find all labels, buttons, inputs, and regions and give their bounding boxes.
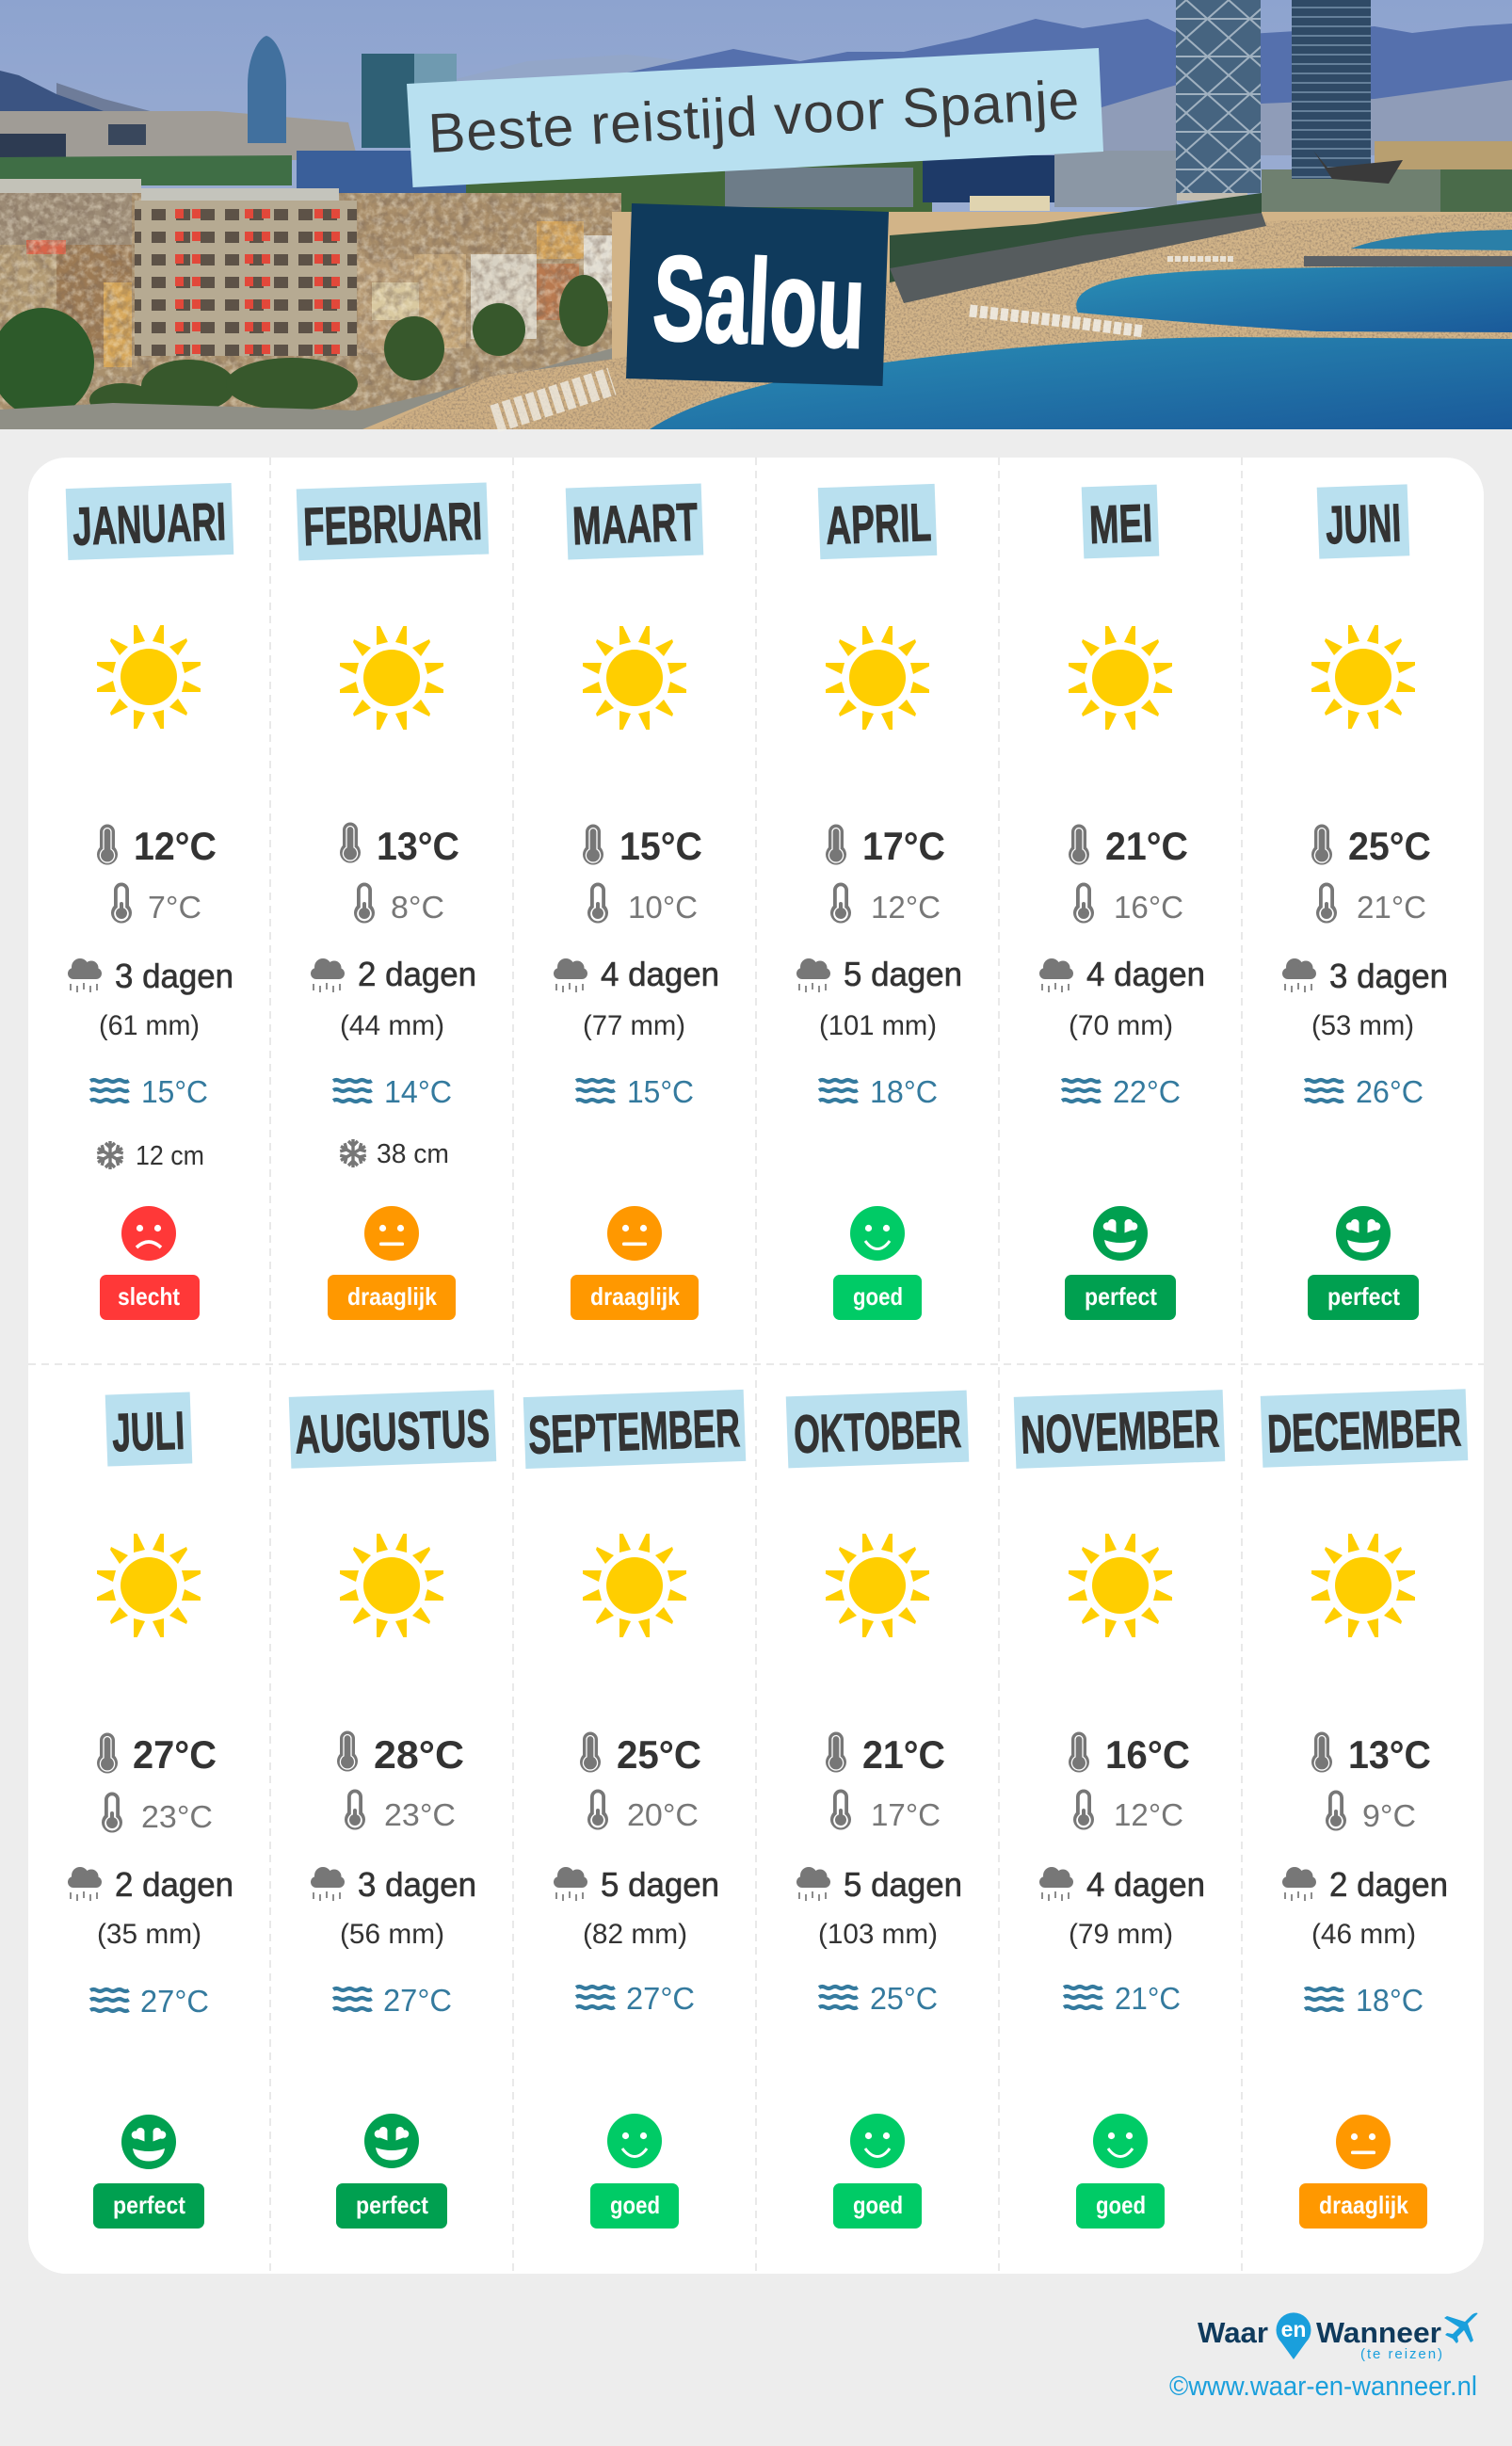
icon: sun: [1069, 1534, 1172, 1637]
sea temperature: [1062, 1074, 1181, 1109]
min temperature: 10°C: [628, 890, 698, 925]
min temperature: 7°C: [148, 890, 201, 925]
rain days: 4 dagen: [601, 955, 719, 993]
sea temperature: 15°C: [627, 1074, 694, 1109]
month label: JULI: [111, 1401, 185, 1463]
icon: sun: [340, 626, 443, 730]
rainfall: (46 mm): [1311, 1919, 1416, 1950]
min temperature: [830, 1789, 941, 1832]
rating face: [364, 1206, 419, 1261]
rain days: [311, 955, 476, 993]
rating label: [833, 2183, 922, 2229]
sea temperature: [333, 1074, 452, 1109]
month label: FEBRUARI: [302, 491, 483, 557]
rainfall: (61 mm): [99, 1010, 200, 1041]
rating label: [1065, 1275, 1176, 1320]
min temperature: 9°C: [1362, 1798, 1416, 1833]
rating face: [1093, 2114, 1148, 2168]
sea temperature: [1305, 1074, 1424, 1109]
min temperature: [1326, 1791, 1416, 1833]
min temperature: [1316, 883, 1426, 925]
rating label: slecht: [118, 1282, 180, 1311]
min temperature: [587, 883, 698, 925]
min temperature: 23°C: [141, 1799, 213, 1834]
sea temperature: [819, 1981, 938, 2016]
max temperature: 16°C: [1105, 1732, 1190, 1777]
sea temperature: [90, 1984, 209, 2019]
sea temperature: 15°C: [141, 1074, 208, 1109]
icon: sun: [826, 626, 929, 730]
min temperature: [345, 1789, 456, 1832]
rating label: [1299, 2183, 1427, 2229]
rating face: [607, 1206, 662, 1261]
month label: OKTOBER: [793, 1399, 962, 1465]
month label: [1317, 484, 1409, 559]
sea temperature: [333, 1983, 452, 2018]
rating label: perfect: [113, 2191, 185, 2219]
website url: ©www.waar-en-wanneer.nl: [1169, 2372, 1477, 2402]
rain days: [68, 1865, 233, 1904]
min temperature: [1073, 883, 1183, 925]
snow: [339, 1139, 449, 1169]
month: november: [1014, 1390, 1225, 2229]
rainfall: (53 mm): [1311, 1010, 1414, 1041]
sea temperature: 25°C: [870, 1981, 938, 2016]
icon: sun: [1311, 625, 1415, 729]
logo: Waar en Wanneer: Wanneer: [1316, 2316, 1441, 2349]
sea temperature: 14°C: [384, 1074, 452, 1109]
min temperature: [1073, 1789, 1183, 1832]
rainfall: (103 mm): [818, 1919, 938, 1950]
rain days: 2 dagen: [1329, 1865, 1448, 1904]
month label: [786, 1391, 969, 1468]
sea temperature: 18°C: [870, 1074, 938, 1109]
min temperature: [587, 1789, 699, 1832]
rating label: [571, 1275, 699, 1320]
month: maart: [554, 484, 719, 1320]
icon: sun: [826, 1534, 929, 1637]
rating label: [93, 2183, 204, 2229]
max temperature: 25°C: [1348, 824, 1431, 868]
month label: APRIL: [825, 492, 932, 556]
rain days: 5 dagen: [844, 955, 962, 993]
min temperature: [102, 1793, 213, 1834]
title banner: [407, 48, 1103, 187]
month label: [289, 1390, 496, 1469]
rating label: [1308, 1275, 1419, 1320]
max temperature: 25°C: [617, 1732, 701, 1777]
max temperature: [1311, 824, 1431, 868]
rain days: 3 dagen: [358, 1865, 476, 1904]
min temperature: 21°C: [1357, 890, 1426, 925]
rating label: [328, 1275, 456, 1320]
min temperature: 16°C: [1114, 890, 1183, 925]
header photo: Salou coast: [0, 0, 1512, 429]
max temperature: 15°C: [619, 824, 702, 868]
max temperature: [1069, 824, 1188, 868]
max temperature: [340, 823, 459, 868]
min temperature: 20°C: [627, 1797, 699, 1832]
rain days: [796, 1865, 962, 1904]
icon: plane: [1444, 2313, 1477, 2343]
rainfall: (79 mm): [1069, 1919, 1173, 1950]
month: oktober: [786, 1391, 969, 2229]
rain days: 5 dagen: [601, 1865, 719, 1904]
sea temperature: 27°C: [626, 1981, 695, 2016]
month: mei: [1039, 485, 1205, 1320]
max temperature: 17°C: [862, 824, 945, 868]
icon: sun: [1311, 1534, 1415, 1637]
panel: months table: [28, 458, 1484, 2274]
sea temperature: [90, 1074, 208, 1109]
rain days: [311, 1865, 476, 1904]
logo: Waar en Wanneer: [1198, 2312, 1477, 2362]
month: april: [796, 484, 962, 1320]
month label: [297, 482, 489, 561]
month label: [818, 484, 937, 559]
month: december: [1261, 1389, 1468, 2229]
month label: [1014, 1390, 1225, 1469]
sea temperature: [576, 1981, 695, 2016]
month label: MAART: [571, 492, 699, 556]
sea temperature: 21°C: [1115, 1981, 1181, 2016]
max temperature: [1069, 1732, 1190, 1777]
min temperature: 23°C: [384, 1797, 456, 1832]
rating face: [1336, 1206, 1391, 1261]
month: januari: [66, 483, 233, 1320]
min temperature: [111, 883, 201, 925]
sea temperature: [1305, 1983, 1424, 2018]
rain days: [1039, 1865, 1205, 1904]
max temperature: 13°C: [377, 824, 459, 868]
max temperature: [97, 1732, 217, 1777]
sea temperature: [576, 1074, 694, 1109]
rating face: [121, 1206, 176, 1261]
rating face: [364, 2114, 419, 2168]
icon: sun: [1069, 626, 1172, 730]
rating label: perfect: [356, 2191, 428, 2219]
rating label: [833, 1275, 922, 1320]
rain days: [1282, 1865, 1448, 1904]
rating label: goed: [1096, 2191, 1146, 2219]
max temperature: [580, 1732, 701, 1777]
max temperature: [583, 824, 702, 868]
min temperature: 8°C: [391, 890, 444, 925]
rating label: draaglijk: [347, 1282, 437, 1311]
sea temperature: 27°C: [383, 1983, 452, 2018]
sea temperature: 27°C: [140, 1984, 209, 2019]
rainfall: (77 mm): [583, 1010, 685, 1041]
rain days: 2 dagen: [358, 955, 476, 993]
max temperature: 27°C: [133, 1732, 217, 1777]
icon: sun: [583, 626, 686, 730]
min temperature: 12°C: [1114, 1797, 1183, 1832]
rating face: [607, 2114, 662, 2168]
rainfall: (35 mm): [97, 1919, 201, 1950]
sea temperature: 26°C: [1356, 1074, 1424, 1109]
month: september: [523, 1390, 746, 2229]
rain days: [796, 955, 962, 993]
min temperature: 17°C: [871, 1797, 941, 1832]
month label: [1082, 485, 1159, 558]
city name banner: Salou: [651, 231, 868, 374]
max temperature: 21°C: [1105, 824, 1188, 868]
month label: NOVEMBER: [1020, 1398, 1220, 1466]
month label: JUNI: [1325, 493, 1402, 555]
rating label: goed: [853, 1282, 903, 1311]
icon: map pin: [1276, 2312, 1311, 2359]
logo: Waar en Wanneer: (te reizen): [1360, 2346, 1442, 2362]
month label: [105, 1392, 192, 1467]
rating face: [121, 2115, 176, 2169]
sea temperature: 22°C: [1113, 1074, 1181, 1109]
rating face: [1093, 1206, 1148, 1261]
rainfall: (44 mm): [340, 1010, 444, 1041]
logo: Waar en Wanneer: Waar: [1198, 2316, 1268, 2349]
month: februari: [297, 482, 489, 1320]
rain days: [554, 1865, 719, 1904]
rating label: goed: [853, 2191, 903, 2219]
max temperature: [826, 824, 945, 868]
max temperature: [826, 1732, 945, 1777]
max temperature: 21°C: [862, 1732, 945, 1777]
sea temperature: 18°C: [1356, 1983, 1424, 2018]
title banner: Beste reistijd voor Spanje: [426, 69, 1081, 165]
rain days: 4 dagen: [1086, 955, 1205, 993]
rating label: draaglijk: [1319, 2191, 1408, 2219]
rainfall: (82 mm): [583, 1919, 687, 1950]
rain days: 2 dagen: [115, 1865, 233, 1904]
rainfall: (101 mm): [819, 1010, 937, 1041]
rating label: [336, 2183, 447, 2229]
max temperature: [97, 824, 217, 868]
sea temperature: [1064, 1981, 1181, 2016]
icon: sun: [97, 625, 201, 729]
month label: [523, 1390, 746, 1469]
rating face: [1336, 2115, 1391, 2169]
max temperature: [337, 1730, 464, 1777]
rating label: draaglijk: [590, 1282, 680, 1311]
rain days: [68, 957, 233, 995]
rain days: 3 dagen: [115, 957, 233, 995]
rainfall: (70 mm): [1069, 1010, 1173, 1041]
max temperature: 13°C: [1348, 1732, 1431, 1777]
city name banner: [626, 203, 889, 386]
rating label: perfect: [1085, 1282, 1157, 1311]
month label: SEPTEMBER: [527, 1398, 741, 1466]
rainfall: (56 mm): [340, 1919, 444, 1950]
min temperature: [354, 883, 444, 925]
month label: [66, 483, 233, 560]
min temperature: 12°C: [871, 890, 941, 925]
rain days: [1039, 955, 1205, 993]
rating label: [100, 1275, 200, 1320]
snow: 38 cm: [377, 1139, 449, 1169]
icon: sun: [340, 1534, 443, 1637]
max temperature: 28°C: [374, 1732, 464, 1777]
rain days: 4 dagen: [1086, 1865, 1205, 1904]
rating label: goed: [610, 2191, 660, 2219]
month label: JANUARI: [72, 491, 227, 557]
month label: MEI: [1088, 493, 1153, 555]
rating label: [590, 2183, 679, 2229]
rain days: 3 dagen: [1329, 957, 1448, 995]
rating face: [850, 2114, 905, 2168]
snow: 12 cm: [136, 1141, 204, 1171]
month label: [566, 484, 703, 559]
month: augustus: [289, 1390, 496, 2229]
logo: Waar en Wanneer: en: [1281, 2317, 1306, 2341]
rain days: 5 dagen: [844, 1865, 962, 1904]
month: juli: [68, 1392, 233, 2229]
rating label: perfect: [1327, 1282, 1400, 1311]
min temperature: [830, 883, 941, 925]
snow: [96, 1141, 204, 1171]
sea temperature: [819, 1074, 938, 1109]
rating label: [1076, 2183, 1165, 2229]
icon: sun: [583, 1534, 686, 1637]
max temperature: 12°C: [134, 824, 217, 868]
month label: AUGUSTUS: [294, 1398, 491, 1466]
rain days: [1282, 957, 1448, 995]
rain days: [554, 955, 719, 993]
icon: sun: [97, 1534, 201, 1637]
month: juni: [1282, 484, 1448, 1320]
rating face: [850, 1206, 905, 1261]
max temperature: [1311, 1732, 1431, 1777]
